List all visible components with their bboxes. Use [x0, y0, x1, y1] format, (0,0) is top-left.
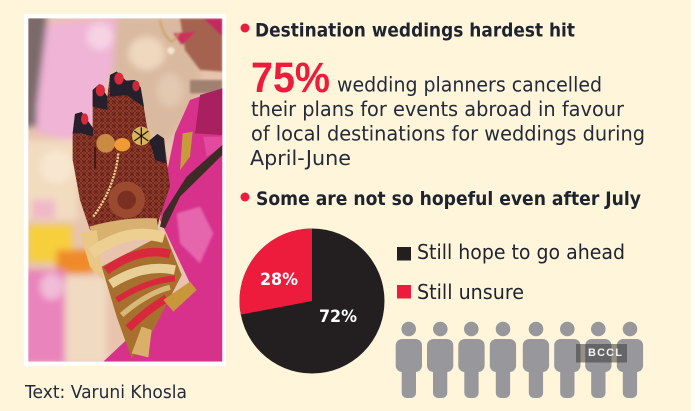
hand with henna	[73, 72, 170, 230]
pie chart	[240, 228, 384, 374]
legend: Still unsure	[417, 280, 524, 304]
label: 28 percent: 28%	[260, 270, 298, 290]
rings and hand chain	[96, 134, 115, 153]
text block: 75 percent statement: wedding planners cancelled	[337, 72, 602, 96]
bride's face and earring	[160, 18, 222, 93]
text block: 75 percent statement: their plans for events abroad in favour	[251, 97, 625, 121]
watermark: BCCL: BCCL	[588, 347, 622, 359]
label: 72 percent: 72%	[319, 307, 357, 327]
legend: Still hope to go ahead	[417, 240, 625, 264]
magenta sari	[103, 88, 222, 362]
photo scene	[23, 13, 222, 363]
text block: 75 percent statement: April-June	[250, 146, 351, 170]
fingertips and nails	[73, 112, 93, 137]
heading: destination weddings: Destination weddings hardest hit	[255, 20, 575, 42]
panel: wedding photo of hennaed hand	[23, 13, 226, 366]
heading: not so hopeful: Some are not so hopeful even after July	[256, 188, 642, 210]
big number: 75%	[251, 54, 330, 102]
text block: 75 percent statement: of local destinations for weddings during	[251, 122, 645, 146]
pictogram: row of people	[396, 322, 643, 398]
watermark: BCCL	[576, 344, 627, 362]
bracelets and bangles	[102, 233, 182, 358]
legend	[397, 240, 625, 304]
credit text: Text: Varuni Khosla	[24, 382, 187, 403]
photo frame	[24, 14, 226, 366]
text block: 75 percent statement	[250, 54, 645, 170]
